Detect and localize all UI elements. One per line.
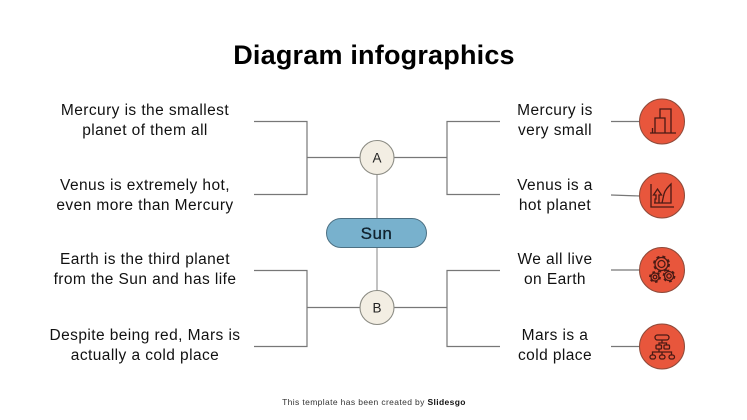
left text: Earth: from the Sun and has life [54,271,236,288]
node B: B [372,300,382,316]
connector lines: bottom right bracket [377,270,500,346]
left text: Venus: even more than Mercury [56,197,234,214]
icon: flowchart [640,324,684,369]
right text: Earth: on Earth [524,271,586,288]
icon: growth chart [640,173,684,218]
right text: Mercury: Mercury is [517,102,593,119]
title: Diagram infographics [233,40,515,70]
right text: Mercury: very small [518,122,592,139]
left text: Venus: Venus is extremely hot, [60,177,230,194]
connector lines: top right bracket [377,122,500,194]
right text: Mars [518,327,592,364]
connector lines: icon stubs [611,122,640,346]
left text: Mercury: Mercury is the smallest [61,102,229,119]
right text: Venus: hot planet [519,197,591,214]
right text: Venus [517,177,593,214]
central pill: Sun [326,218,426,248]
left text: Earth [54,251,236,288]
right text: Earth [518,251,592,288]
left text: Mercury [61,102,229,139]
icon: gears [640,248,684,292]
right text: Mars: Mars is a [522,327,588,344]
right text: Mercury [517,102,593,139]
right text: Venus: Venus is a [517,177,593,194]
connector lines: top left bracket [254,122,377,194]
connector lines: bottom left bracket [254,270,377,346]
left text: Mars: Despite being red, Mars is [50,327,240,344]
left text: Mars [50,327,240,364]
footer credit: This template has been created by Slidesgo [282,397,466,407]
connector lines: central vertical [376,157,378,307]
left text: Mars: actually a cold place [71,347,219,364]
node B [360,290,394,324]
right text: Earth: We all live [518,251,592,268]
icon: bar chart [640,99,684,144]
node A [360,140,394,174]
node A: A [372,150,382,166]
right text: Mars: cold place [518,347,592,364]
left text: Mercury: planet of them all [82,122,208,139]
left text: Venus [56,177,234,214]
left text: Earth: Earth is the third planet [60,251,230,268]
central pill: Sun: Sun [361,224,392,243]
